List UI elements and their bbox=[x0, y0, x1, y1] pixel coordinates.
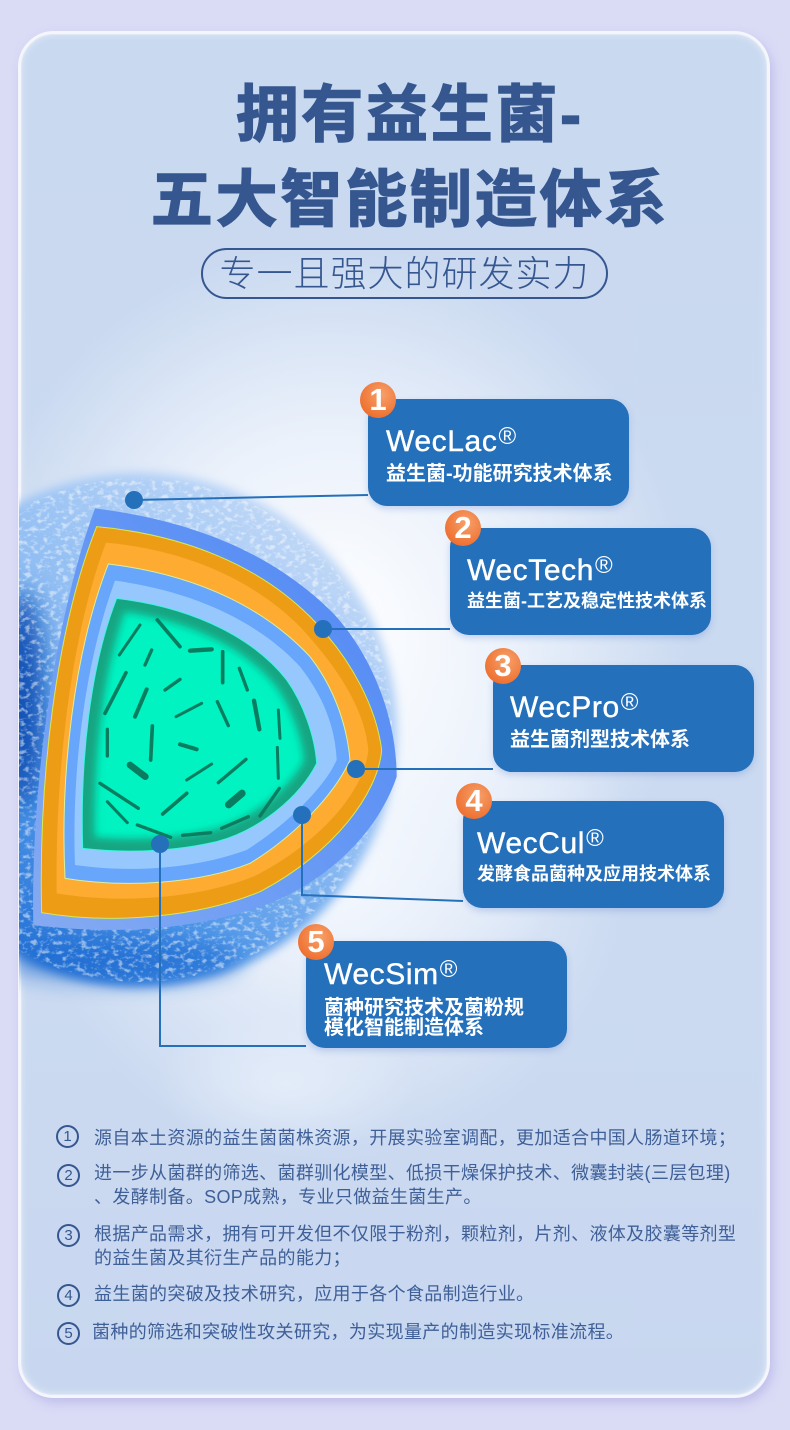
badge 1 bbox=[360, 382, 396, 418]
note 2 text: 、发酵制备。SOP成熟，专业只做益生菌生产。 bbox=[94, 1187, 482, 1207]
callout 4: WecCul: 发酵食品菌种及应用技术体系 bbox=[477, 864, 711, 884]
callout 1: WecLac: 益生菌-功能研究技术体系 bbox=[386, 463, 613, 485]
title: line 1: 拥有益生菌- bbox=[236, 81, 584, 150]
badge 3: 3 bbox=[494, 648, 512, 683]
outer shell layer bbox=[33, 508, 397, 930]
badge 5: 5 bbox=[307, 924, 325, 959]
note 3 text bbox=[94, 1224, 736, 1268]
blue layer bbox=[64, 564, 350, 883]
leader line 3 bbox=[347, 760, 493, 778]
subtitle pill: 专一且强大的研发实力 bbox=[219, 253, 590, 294]
orange layer bbox=[41, 527, 382, 918]
title: line 2: 五大智能制造体系 bbox=[151, 166, 669, 235]
note 2 text bbox=[94, 1163, 731, 1207]
note 2 number: 2 bbox=[64, 1167, 73, 1184]
note 1 text: 源自本土资源的益生菌菌株资源，开展实验室调配，更加适合中国人肠道环境； bbox=[94, 1128, 736, 1148]
note 3 text: 的益生菌及其衍生产品的能力； bbox=[94, 1248, 351, 1268]
callout 5: WecSim: 菌种研究技术及菌粉规 bbox=[324, 997, 524, 1019]
callout 2: WecTech: WecTech® bbox=[467, 552, 613, 587]
callout 1: WecLac: WecLac® bbox=[386, 423, 516, 458]
leader line 1 bbox=[125, 491, 368, 509]
note 3 text: 根据产品需求，拥有可开发但不仅限于粉剂，颗粒剂，片剂、液体及胶囊等剂型 bbox=[94, 1224, 736, 1244]
badge 5 bbox=[298, 924, 334, 960]
badge 4 bbox=[456, 783, 492, 819]
badge 2 bbox=[445, 510, 481, 546]
cross-section wedge bbox=[33, 508, 397, 930]
badge 2: 2 bbox=[454, 510, 472, 545]
note 3 number bbox=[57, 1224, 80, 1247]
callout 5: WecSim bbox=[306, 941, 567, 1048]
light orange band bbox=[57, 543, 368, 899]
callout 3: WecPro: WecPro® bbox=[510, 689, 638, 724]
badge 3 bbox=[485, 648, 521, 684]
callout 2: WecTech bbox=[450, 528, 711, 635]
note 3 number: 3 bbox=[64, 1227, 73, 1244]
light blue layer bbox=[74, 581, 337, 869]
teal core bbox=[82, 598, 317, 851]
note 1 number: 1 bbox=[63, 1128, 72, 1145]
sphere: icy textured surface bbox=[0, 473, 397, 987]
badge 1: 1 bbox=[369, 382, 387, 417]
leader line 2 bbox=[314, 620, 450, 638]
diagram: probiotic sphere cross-section with leader lines bbox=[19, 468, 493, 1047]
note 5 number bbox=[57, 1322, 80, 1345]
note 5 text: 菌种的筛选和突破性攻关研究，为实现量产的制造实现标准流程。 bbox=[92, 1322, 624, 1342]
badge 4: 4 bbox=[465, 783, 483, 818]
note 2 number bbox=[57, 1164, 80, 1187]
callout 5: WecSim: WecSim® bbox=[324, 956, 457, 991]
note 2 text: 进一步从菌群的筛选、菌群驯化模型、低损干燥保护技术、微囊封装(三层包理) bbox=[94, 1163, 731, 1183]
callout 4: WecCul: WecCul® bbox=[477, 825, 604, 860]
note 1 number bbox=[56, 1125, 79, 1148]
callout 2: WecTech: 益生菌-工艺及稳定性技术体系 bbox=[467, 591, 707, 611]
numbered notes bbox=[56, 1125, 736, 1345]
note 4 number bbox=[57, 1284, 80, 1307]
callout 3: WecPro bbox=[493, 665, 754, 772]
note 5 number: 5 bbox=[64, 1325, 73, 1342]
callout 5: WecSim: 模化智能制造体系 bbox=[324, 1017, 484, 1039]
callout 1: WecLac bbox=[368, 399, 629, 506]
callout 4: WecCul bbox=[463, 801, 724, 908]
note 4 number: 4 bbox=[64, 1287, 73, 1304]
leader line 4 bbox=[293, 806, 463, 901]
leader line 5 bbox=[151, 835, 306, 1046]
note 4 text: 益生菌的突破及技术研究，应用于各个食品制造行业。 bbox=[94, 1284, 534, 1304]
callout 3: WecPro: 益生菌剂型技术体系 bbox=[510, 729, 690, 751]
bacteria rods bbox=[100, 620, 280, 837]
